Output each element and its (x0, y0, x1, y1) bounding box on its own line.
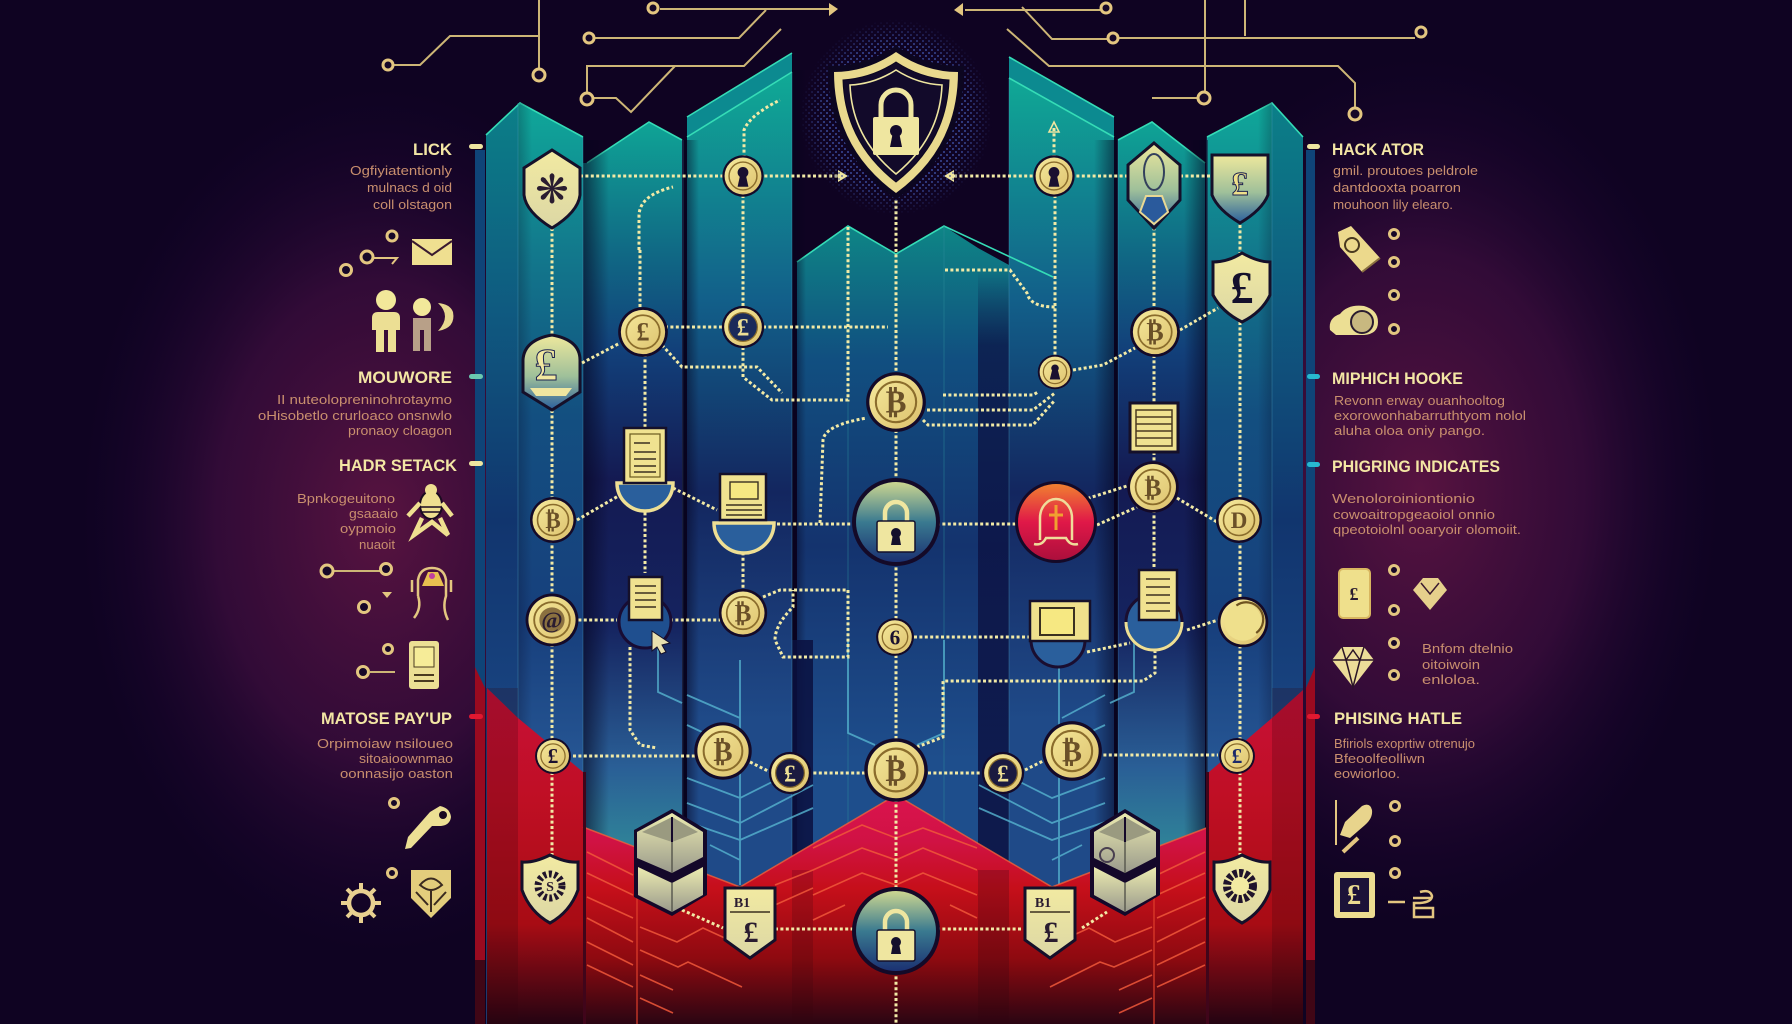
left text block: hadr setack: Bpnkogeuitono (297, 492, 395, 506)
right text block: phighing indicates: qpeotoiolnl ooaryoir olomoiit. (1333, 523, 1521, 537)
outer left column (486, 103, 583, 1024)
left icons: nodes and hooded head (321, 564, 451, 620)
icon: centre coin (866, 372, 926, 432)
icon: laptop on bowl right (1030, 601, 1090, 667)
side ticks (469, 144, 1320, 719)
icon: pound shield top: £ (1232, 166, 1248, 203)
icon: shield bug (524, 150, 580, 228)
icon: centre lock circle (852, 478, 940, 566)
left text block: hadr setack (297, 456, 458, 552)
icon: centre small coin (876, 618, 914, 656)
right text block: hack ator (1332, 140, 1478, 212)
icon: pound shield top (1212, 155, 1268, 223)
right text block: phighing indicates: cowoaitropgeaoiol onnio (1333, 508, 1495, 522)
circuit lines at top (383, 0, 1426, 120)
left icon: key pen (390, 798, 451, 849)
icon: coin: ₿ (1144, 473, 1162, 502)
icon: gear shield right (1214, 855, 1270, 923)
icon: coin: £ (548, 744, 558, 768)
icon: coin: £ (637, 318, 650, 347)
central shield with lock (800, 19, 992, 215)
left icons: phone with nodes (358, 641, 439, 689)
icon: pound shield: £ (534, 339, 558, 390)
icon: document on bowl (617, 428, 673, 511)
icon: gear shield left: S (546, 880, 554, 895)
left text block: matose pay up: MATOSE PAY'UP (321, 709, 452, 728)
icon: document on bowl right (1126, 570, 1182, 650)
dotted network connections (552, 100, 1240, 1024)
icon: coin (1219, 738, 1255, 774)
icon: coin (1130, 307, 1180, 357)
red lower section (486, 688, 1303, 1024)
icon: shield bug: ❋ (535, 167, 569, 213)
icon: laptop on bowl (714, 474, 774, 553)
icon: stacked box right (1090, 809, 1160, 916)
icon: document with cursor (619, 577, 671, 654)
right icon: framed pound with sign: £ (1347, 880, 1361, 911)
left text block: hadr setack: HADR SETACK (339, 456, 458, 475)
right icons: tag and nodes (1338, 226, 1398, 272)
right text block: small note: oitoiwoin (1422, 658, 1480, 672)
centre column (797, 226, 1053, 1024)
icon: keyhole coin right (1033, 155, 1075, 197)
cyan panel lines (658, 640, 1134, 885)
icon: pound crest right (1025, 888, 1075, 958)
right text block: hack ator: dantdooxta poarron (1333, 181, 1461, 195)
icon: pound shield right: £ (1230, 262, 1254, 313)
right text block: miphich hooke: MIPHICH HOOKE (1332, 369, 1463, 388)
left text block: mouwore: II nuteolopreninohrotaymo (277, 393, 452, 407)
right icons: phone and small diamond: £ (1350, 584, 1358, 604)
column shading (518, 70, 1272, 1024)
icon: coin (530, 497, 576, 543)
icon: coin: £ (997, 761, 1009, 787)
left text block: mouwore: MOUWORE (358, 368, 452, 387)
icon: coin: £ (1232, 744, 1242, 768)
icon: gear shield left (522, 855, 578, 923)
icon: pound crest left: £ (744, 916, 758, 949)
icon: coin (1042, 721, 1102, 781)
right icon: framed pound with sign (1334, 868, 1433, 918)
right text block: miphich hooke: aluha oloa oniy pango. (1334, 424, 1485, 438)
right text block: small note (1422, 642, 1513, 687)
right edge strip (1306, 150, 1315, 1024)
icon: coin small keyhole (1038, 355, 1072, 389)
icon: coin with swirl: @ (541, 608, 563, 634)
third column left (687, 53, 792, 1024)
icon: pound crest right: £ (1044, 916, 1058, 949)
right text block: phising hatle: eowiorloo. (1334, 767, 1400, 781)
icon: bottom lock circle (852, 887, 940, 975)
left text block: matose pay up: oonnasijo oaston (340, 767, 453, 781)
icon: pound shield (523, 335, 580, 410)
padlock (873, 90, 919, 155)
left text block: lick: coll olstagon (373, 198, 452, 212)
second column left (583, 122, 682, 1024)
right text block: miphich hooke: exorowonhabarruthtyom nolol (1334, 409, 1526, 423)
left text block: matose pay up: Orpimoiaw nsiloueo (317, 737, 453, 751)
dotted halo (800, 19, 992, 215)
icon: coin: ₿ (1062, 735, 1082, 768)
left text block: hadr setack: gsaaaio (349, 507, 398, 521)
right icons: big diamond (1332, 638, 1398, 687)
icon: pound crest right: B1 (1035, 896, 1051, 911)
left text block: matose pay up: sitoaioownmao (359, 752, 453, 766)
right text block: phighing indicates: Wenoloroiniontionio (1332, 492, 1475, 506)
icon: document square (1130, 403, 1178, 452)
icon: coin (982, 752, 1024, 794)
icon: coin (769, 752, 811, 794)
right text block: phighing indicates: PHIGRING INDICATES (1332, 457, 1500, 476)
icon: coin ring (1218, 597, 1268, 647)
panel: central column structure (475, 53, 1315, 1024)
icon: stacked box left (634, 809, 707, 916)
right text block: phising hatle (1334, 709, 1475, 781)
icon: coin centre lower (864, 738, 928, 802)
icon: pound crest left (725, 888, 775, 958)
right text block: phising hatle: Bfeoolfeolliwn (1334, 752, 1425, 766)
icon: coin (535, 738, 571, 774)
right text block: miphich hooke (1332, 369, 1526, 438)
left icon: gear (341, 868, 396, 923)
left text block: lick (350, 140, 453, 212)
icon: coin: £ (784, 761, 796, 787)
left text block: matose pay up (317, 709, 453, 781)
right icon: rocket (1336, 800, 1400, 852)
icon: coin: D (1231, 508, 1247, 533)
shield (830, 48, 962, 197)
left icon: crest shield (411, 870, 451, 918)
right text block: phising hatle: PHISING HATLE (1334, 709, 1462, 728)
icon: coin (1127, 461, 1179, 513)
icon: red alert circle (1015, 481, 1097, 563)
right icons: cloud (1330, 290, 1398, 335)
icon: coin (1216, 497, 1262, 543)
icon: coin (719, 589, 767, 637)
left text block: mouwore: oHisobetlo crurloaco onsnwlo (258, 409, 452, 423)
right text block: hack ator: mouhoon lily elearo. (1333, 198, 1453, 212)
left edge strip (475, 150, 485, 1024)
left icons: people (372, 290, 453, 352)
left text block: lick: Ogfiyiatentionly (350, 164, 453, 178)
icon: coin: ₿ (1146, 318, 1164, 347)
icon: person shield (1128, 143, 1180, 228)
icon: coin: ₿ (713, 736, 733, 768)
outer right column (1207, 103, 1303, 1024)
left text block: mouwore (258, 368, 452, 438)
icon: coin with swirl (526, 594, 578, 646)
arrows on dotted lines (838, 122, 1059, 182)
right text block: hack ator: HACK ATOR (1332, 140, 1424, 159)
right text block: hack ator: gmil. proutoes peldrole (1333, 164, 1478, 178)
chevron lines in red (587, 825, 1205, 1013)
icon: coin: £ (737, 314, 749, 341)
left text block: lick: LICK (413, 140, 453, 159)
third column right (1009, 57, 1114, 1024)
second column right (1118, 122, 1205, 1024)
right text block: phising hatle: Bfiriols exoprtiw otrenujo (1334, 737, 1475, 751)
left text block: hadr setack: nuaoit (359, 538, 396, 552)
right text block: phighing indicates (1332, 457, 1521, 537)
icon: coin (694, 722, 752, 780)
icon: coin (722, 306, 764, 348)
icon: centre small coin: 6 (890, 625, 901, 649)
icon: keyhole coin left (722, 155, 764, 197)
icon: coin (618, 307, 668, 357)
icon: pound shield right (1213, 253, 1270, 322)
icon: coin centre lower: ₿ (885, 753, 907, 788)
left text block: hadr setack: oypmoio (340, 522, 396, 536)
icon: centre coin: ₿ (886, 384, 906, 419)
right text block: miphich hooke: Revonn erway ouanhooltog (1334, 394, 1505, 408)
left text block: lick: mulnacs d oid (367, 181, 452, 195)
right text block: small note: enloloa. (1422, 673, 1480, 687)
right icons: phone and small diamond (1339, 566, 1447, 618)
icon: bug (408, 484, 452, 535)
right text block: small note: Bnfom dtelnio (1422, 642, 1513, 656)
icon: pound crest left: B1 (734, 896, 750, 911)
icon: coin: ₿ (735, 600, 752, 627)
icon: coin: ₿ (545, 508, 561, 533)
left text block: mouwore: pronaoy cloagon (348, 424, 452, 438)
left icons: envelope and key (340, 231, 452, 276)
